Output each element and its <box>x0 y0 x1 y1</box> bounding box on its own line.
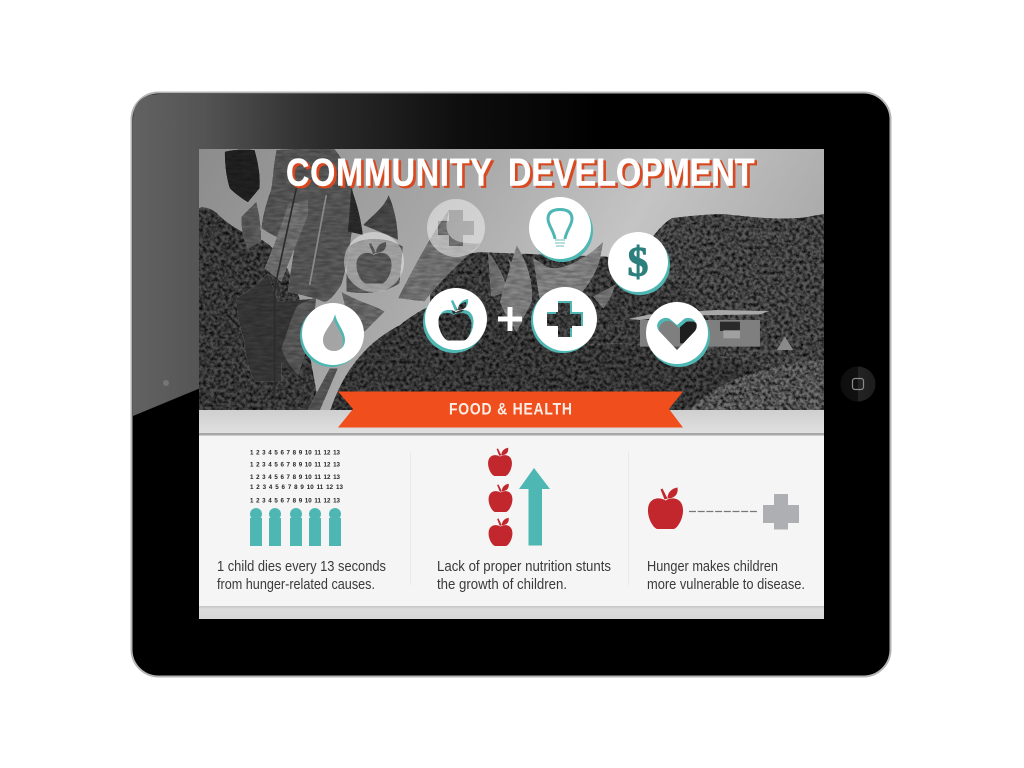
camera lens <box>163 380 169 386</box>
number grid: 1 2 3 4 5 6 7 8 9 10 11 12 13 <box>250 498 341 504</box>
dashed link <box>689 510 758 512</box>
mid hill <box>430 252 700 349</box>
icon: apple <box>423 288 487 353</box>
glass reflection <box>133 94 700 416</box>
divider <box>628 452 629 585</box>
left bushes <box>199 207 320 411</box>
caption: Hunger makes children <box>647 559 778 575</box>
number grid: 1 2 3 4 5 6 7 8 9 10 11 12 13 <box>250 450 341 456</box>
three apples <box>488 448 512 546</box>
icon: dollar sign <box>608 232 670 295</box>
grey cross <box>763 494 799 530</box>
central foreground bushes <box>330 300 773 410</box>
number grid: 1 2 3 4 5 6 7 8 9 10 11 12 13 <box>250 462 341 468</box>
number grid <box>250 450 344 504</box>
grey band under photo <box>199 410 824 433</box>
house <box>628 310 793 350</box>
apple <box>648 488 683 529</box>
large banana leaves <box>225 149 385 415</box>
caption: from hunger-related causes. <box>217 577 375 593</box>
bottom band <box>199 606 824 619</box>
growth arrow <box>519 468 550 546</box>
icon: dollar sign: $ <box>628 240 648 286</box>
lower right lighter bushes <box>690 360 824 411</box>
divider <box>410 452 411 585</box>
icon: light bulb <box>529 197 593 262</box>
number grid: 1 2 3 4 5 6 7 8 9 10 11 12 13 <box>250 474 341 481</box>
title: DEVELOPMENT <box>508 151 755 194</box>
title: COMMUNITY <box>286 151 492 194</box>
central banana plants <box>346 195 528 302</box>
panel: child mortality <box>217 450 386 593</box>
ribbon label: FOOD & HEALTH <box>449 400 572 419</box>
caption: more vulnerable to disease. <box>647 577 805 593</box>
icon: faded apple <box>344 232 404 292</box>
mountain <box>653 214 824 368</box>
home button <box>840 366 876 402</box>
caption: 1 child dies every 13 seconds <box>217 559 386 575</box>
tablet body <box>132 92 890 676</box>
caption: the growth of children. <box>437 577 567 593</box>
ribbon heading <box>338 392 683 428</box>
screen background <box>199 149 824 619</box>
caption: Lack of proper nutrition stunts <box>437 559 611 575</box>
title <box>286 151 757 196</box>
landscape photo <box>199 149 824 415</box>
caption <box>217 559 386 593</box>
icon: plus sign <box>498 307 522 331</box>
icon: water drop <box>300 303 364 367</box>
number grid: 1 2 3 4 5 6 7 8 9 10 11 12 13 <box>250 484 344 491</box>
title: COMMUNITY <box>288 153 494 196</box>
band shadow line <box>199 433 824 436</box>
panel: hunger and disease <box>647 488 805 593</box>
icon: medical cross <box>531 287 597 353</box>
caption <box>647 559 805 593</box>
icon: faded cross <box>427 199 485 257</box>
icon: heart <box>646 302 710 367</box>
caption <box>437 559 611 593</box>
child figures <box>250 508 341 546</box>
title: DEVELOPMENT <box>510 153 757 196</box>
panel: nutrition and growth <box>437 448 611 593</box>
